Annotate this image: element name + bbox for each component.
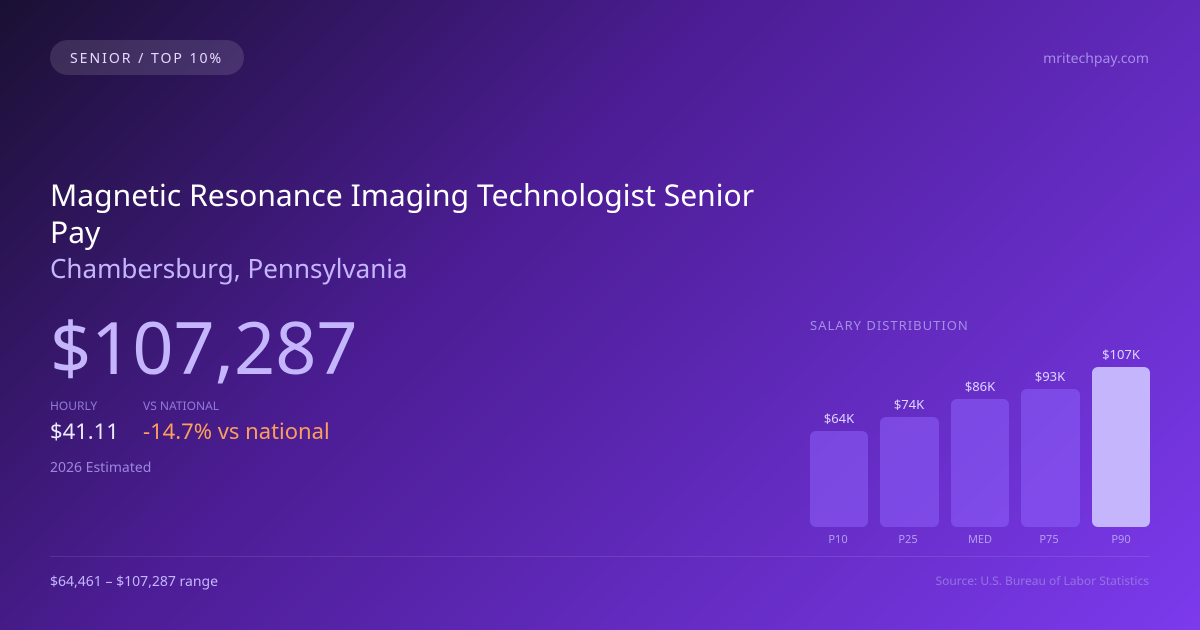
vs national stat xyxy=(143,397,330,446)
salary range: $64,461 – $107,287 range xyxy=(50,572,218,591)
badge: senior / top 10%: SENIOR / TOP 10% xyxy=(70,49,223,68)
vs national stat: -14.7% vs national xyxy=(143,416,330,446)
percentile labels: MED xyxy=(968,532,992,547)
site name: mritechpay.com xyxy=(1043,49,1149,68)
percentile labels: P75 xyxy=(1039,532,1059,547)
bar P75 xyxy=(1021,389,1080,527)
bar chart: salary distribution xyxy=(810,316,1150,547)
hourly stat: HOURLY xyxy=(50,397,97,414)
vs national stat: VS NATIONAL xyxy=(143,397,219,414)
bar chart: salary distribution: $93K xyxy=(1035,367,1065,385)
bar P10 xyxy=(810,431,868,527)
hourly stat: $41.11 xyxy=(50,416,119,446)
bar P25 xyxy=(880,417,939,527)
percentile labels: P25 xyxy=(898,532,918,547)
percentile labels: P10 xyxy=(828,532,848,547)
bar chart: salary distribution: $74K xyxy=(894,395,924,413)
source: Source: U.S. Bureau of Labor Statistics xyxy=(936,572,1149,589)
main salary: $107,287 xyxy=(50,298,358,396)
percentile labels xyxy=(828,532,1131,547)
location subtitle: Chambersburg, Pennsylvania xyxy=(50,250,408,286)
bar P90 xyxy=(1092,367,1150,527)
hourly stat xyxy=(50,397,119,446)
percentile labels: P90 xyxy=(1111,532,1131,547)
estimate note: 2026 Estimated xyxy=(50,458,151,477)
badge: senior / top 10% xyxy=(50,40,244,75)
bar median xyxy=(951,399,1009,527)
title: Magnetic Resonance Imaging Technologist Senior Pay xyxy=(50,174,754,252)
value labels xyxy=(824,345,1140,427)
chart heading: SALARY DISTRIBUTION xyxy=(810,316,969,334)
bar chart: salary distribution: $64K xyxy=(824,409,854,427)
value labels: $107K xyxy=(1102,345,1140,363)
bar chart: salary distribution: $86K xyxy=(965,377,995,395)
